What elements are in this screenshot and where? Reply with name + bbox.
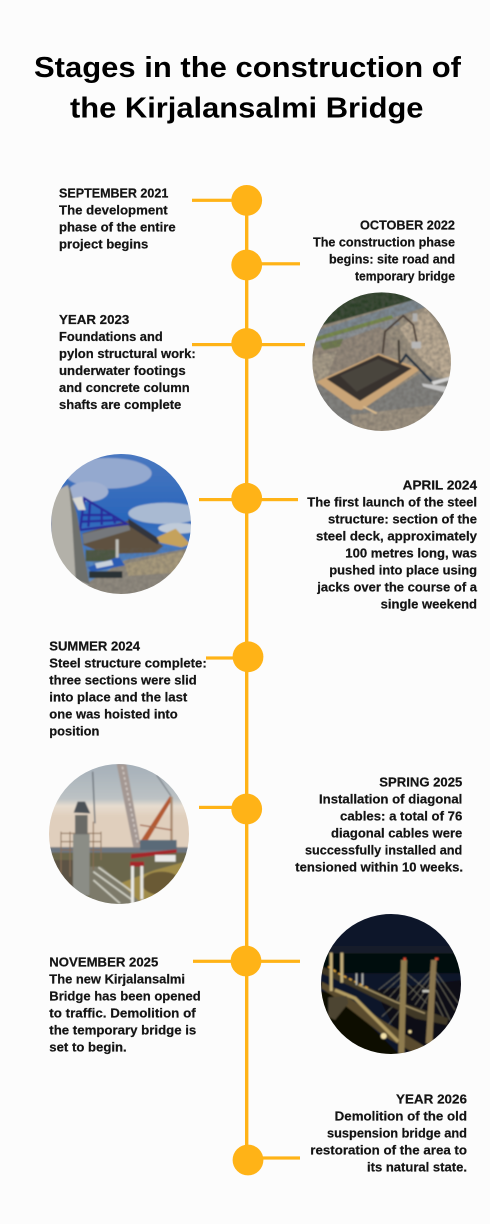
text block: Summer 2024: position [49, 725, 99, 739]
text block: Summer 2024: one was hoisted into [49, 708, 178, 722]
text block: November 2025: to traffic. Demolition of [49, 1006, 197, 1020]
text block: April 2024: The first launch of the steel [307, 495, 477, 509]
text block: October 2022: The construction phase [313, 236, 455, 250]
stage marker: Year 2026 [233, 1145, 300, 1175]
stage marker: April 2024 [199, 483, 298, 514]
text block: Year 2026 [310, 1093, 467, 1175]
text block: Year 2026: Demolition of the old [335, 1110, 467, 1124]
stage marker: Year 2023 [192, 328, 305, 359]
photo: steel deck launch beside the pylon [51, 454, 191, 594]
text block: September 2021: SEPTEMBER 2021 [59, 187, 168, 201]
stage marker: October 2022 [231, 250, 300, 280]
text block: Year 2023: underwater footings [59, 364, 186, 378]
text block: Summer 2024 [49, 640, 207, 739]
text block: September 2021: The development [59, 204, 169, 218]
text block: Summer 2024: three sections were slid [49, 674, 197, 688]
text block: Year 2023: YEAR 2023 [59, 313, 129, 327]
text block: Summer 2024: into place and the last [49, 691, 188, 705]
text block: November 2025: The new Kirjalansalmi [49, 972, 185, 986]
text block: Year 2023: shafts are complete [59, 398, 181, 412]
text block: Summer 2024: Steel structure complete: [49, 657, 207, 671]
text block: April 2024: APRIL 2024 [403, 478, 477, 492]
text block: April 2024: jacks over the course of a [316, 580, 478, 594]
text block: October 2022: begins: site road and [329, 253, 455, 267]
stage marker: September 2021 [192, 185, 262, 216]
text block: October 2022: OCTOBER 2022 [360, 219, 455, 233]
text block: April 2024: steel deck, approximately [316, 529, 477, 543]
text block: Year 2026: suspension bridge and [327, 1127, 467, 1141]
text block: Spring 2025: SPRING 2025 [379, 775, 462, 789]
stage marker: Summer 2024 [206, 641, 263, 672]
text block: Year 2023: pylon structural work: [59, 347, 196, 361]
photo: tower crane and concrete pylon [47, 762, 192, 907]
text block: April 2024: single weekend [381, 597, 477, 611]
text block: Spring 2025 [295, 775, 463, 874]
text block: Spring 2025: Installation of diagonal [319, 792, 462, 806]
text block: Spring 2025: cables: a total of 76 [340, 809, 462, 823]
text block: September 2021: project begins [59, 238, 148, 252]
title: the Kirjalansalmi Bridge [70, 93, 424, 125]
text block: Spring 2025: diagonal cables were [331, 826, 462, 840]
text block: Spring 2025: successfully installed and [305, 843, 462, 857]
text block: Year 2026: YEAR 2026 [396, 1093, 467, 1107]
text block: October 2022: temporary bridge [355, 270, 455, 284]
text block: Year 2026: its natural state. [367, 1161, 467, 1175]
text block: November 2025: NOVEMBER 2025 [49, 955, 158, 969]
text block: October 2022 [313, 219, 455, 284]
text block: September 2021 [59, 187, 176, 252]
text block: April 2024: 100 metres long, was [345, 546, 477, 560]
text block: September 2021: phase of the entire [59, 221, 176, 235]
text block: Year 2026: restoration of the area to [310, 1144, 467, 1158]
text block: Summer 2024: SUMMER 2024 [49, 640, 140, 654]
text block: April 2024: structure: section of the [328, 512, 477, 526]
text block: April 2024: pushed into place using [329, 563, 477, 577]
timeline [192, 185, 305, 1175]
photo: completed bridge lit at night [318, 912, 465, 1058]
title: Stages in the construction of [34, 52, 461, 84]
text block: November 2025 [49, 955, 201, 1054]
text block: Spring 2025: tensioned within 10 weeks. [295, 860, 463, 874]
text block: Year 2023: Foundations and [59, 330, 163, 344]
text block: April 2024 [307, 478, 478, 611]
text block: November 2025: the temporary bridge is [49, 1023, 196, 1037]
text block: Year 2023 [59, 313, 196, 412]
timeline spine [245, 200, 248, 1160]
title [34, 52, 461, 125]
text block: November 2025: Bridge has been opened [49, 989, 201, 1003]
photo: foundation pit at the construction site [310, 290, 453, 433]
stage marker: Spring 2025 [199, 794, 262, 824]
text block: Year 2023: and concrete column [59, 381, 190, 395]
text block: November 2025: set to begin. [49, 1040, 127, 1054]
stage marker: November 2025 [193, 946, 300, 976]
